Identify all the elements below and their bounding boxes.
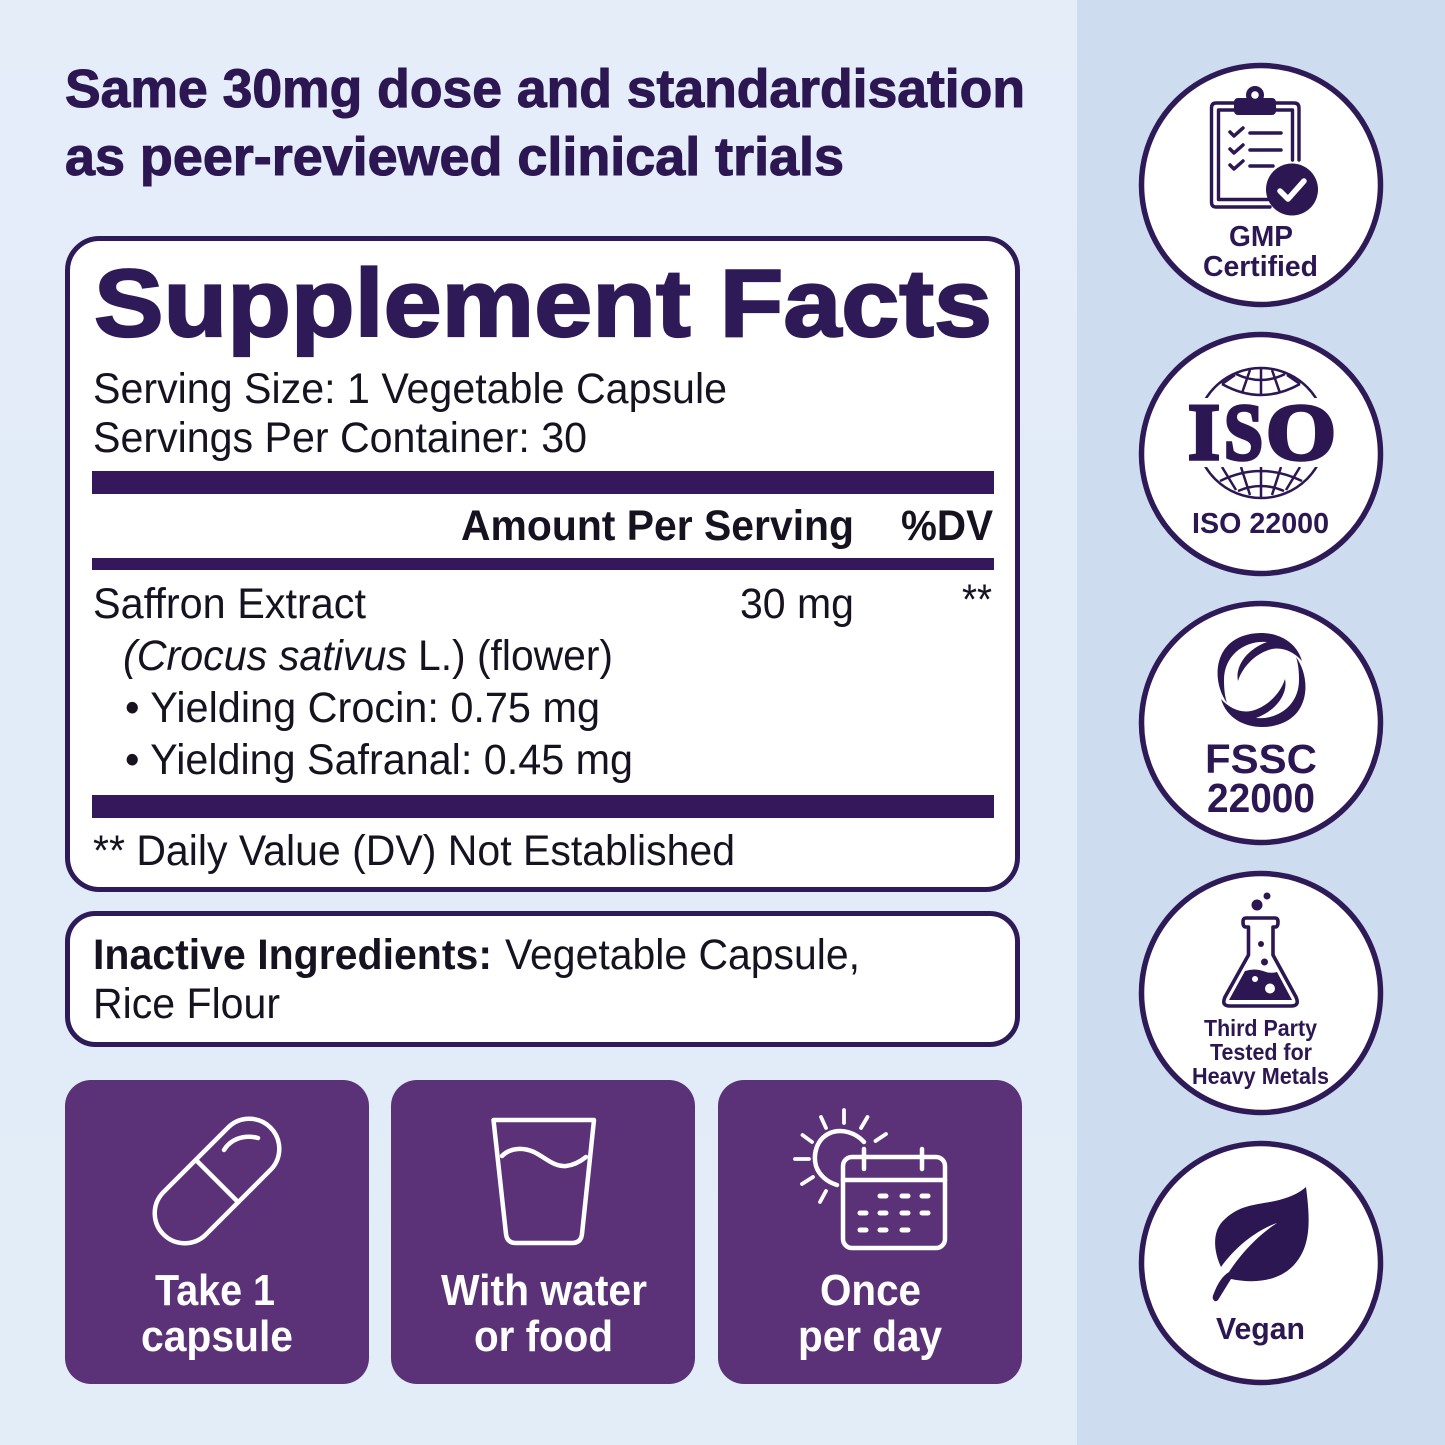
thick divider top xyxy=(92,471,994,494)
heading: Same 30mg dose and standardisation xyxy=(65,59,1025,119)
badge: FSSC 22000 xyxy=(1142,604,1380,842)
ingredient rows: L.) (flower) xyxy=(418,632,613,680)
panel: inactive ingredients xyxy=(68,914,1018,1044)
icon: leaf xyxy=(1213,1187,1309,1301)
icon: capsule xyxy=(155,1119,279,1243)
panel: supplement facts xyxy=(68,238,1018,890)
label: or food xyxy=(474,1312,613,1361)
badge label xyxy=(1192,1015,1329,1089)
icon: flask xyxy=(1224,892,1297,1006)
label: capsule xyxy=(141,1312,293,1361)
badge: third party tested xyxy=(1142,874,1380,1112)
label xyxy=(141,1266,293,1361)
panel: inactive ingredients: Rice Flour xyxy=(93,980,280,1028)
column headers: %DV xyxy=(901,502,993,550)
thick divider bottom xyxy=(92,795,994,818)
badge: ISO 22000 xyxy=(1142,334,1380,574)
badge label xyxy=(1203,221,1318,283)
label: Take 1 xyxy=(155,1266,275,1315)
icon: ISO globe logo: S xyxy=(1224,389,1263,477)
badge label xyxy=(1205,736,1317,821)
label: With water xyxy=(441,1266,647,1315)
medium divider xyxy=(92,558,994,570)
badge label: Heavy Metals xyxy=(1192,1063,1329,1089)
tile: take 1 capsule xyxy=(65,1080,369,1384)
panel: inactive ingredients: Vegetable Capsule, xyxy=(505,931,860,979)
heading xyxy=(65,59,1025,187)
background: left area xyxy=(0,0,1077,1445)
footnote: ** Daily Value (DV) Not Established xyxy=(93,827,735,875)
icon: ISO globe logo: O xyxy=(1266,389,1336,477)
icon: ISO globe logo xyxy=(1188,368,1336,498)
icon: ISO globe logo: I xyxy=(1188,389,1220,477)
icon: sun and calendar xyxy=(795,1110,945,1248)
column headers: Amount Per Serving xyxy=(461,502,854,550)
ingredient rows: • Yielding Crocin: 0.75 mg xyxy=(125,684,600,732)
ingredient rows: (Crocus sativus xyxy=(123,632,407,680)
ingredient rows: ** xyxy=(962,576,992,624)
heading: as peer-reviewed clinical trials xyxy=(65,127,844,187)
serving info: Servings Per Container: 30 xyxy=(93,414,587,462)
badge label: ISO 22000 xyxy=(1192,508,1329,540)
label: Once xyxy=(820,1266,921,1315)
badge label: Certified xyxy=(1203,251,1318,283)
label xyxy=(441,1266,647,1361)
serving info xyxy=(93,365,727,462)
badge: GMP certified xyxy=(1142,66,1380,304)
badge label: Third Party xyxy=(1204,1015,1317,1041)
ingredient rows xyxy=(93,576,992,784)
ingredient rows: 30 mg xyxy=(740,580,854,628)
label xyxy=(798,1266,942,1361)
ingredient rows: • Yielding Safranal: 0.45 mg xyxy=(125,736,633,784)
tile: with water or food xyxy=(391,1080,695,1384)
supplement facts title: Supplement Facts xyxy=(94,250,992,357)
tile: once per day xyxy=(718,1080,1022,1384)
icon: FSSC swirl logo xyxy=(1218,633,1305,727)
icon: clipboard with check xyxy=(1212,86,1318,216)
label: per day xyxy=(798,1312,942,1361)
badge label: 22000 xyxy=(1207,775,1315,821)
badge label: GMP xyxy=(1229,221,1293,253)
badge: vegan xyxy=(1142,1144,1380,1382)
background: right column xyxy=(1077,0,1445,1445)
serving info: Serving Size: 1 Vegetable Capsule xyxy=(93,365,727,413)
panel: inactive ingredients: Inactive Ingredients: xyxy=(93,931,492,979)
badge label: Tested for xyxy=(1210,1039,1312,1065)
icon: glass of water xyxy=(494,1120,594,1243)
badge label: Vegan xyxy=(1216,1311,1305,1346)
ingredient rows: Saffron Extract xyxy=(93,580,366,628)
badge label: FSSC xyxy=(1205,736,1317,782)
